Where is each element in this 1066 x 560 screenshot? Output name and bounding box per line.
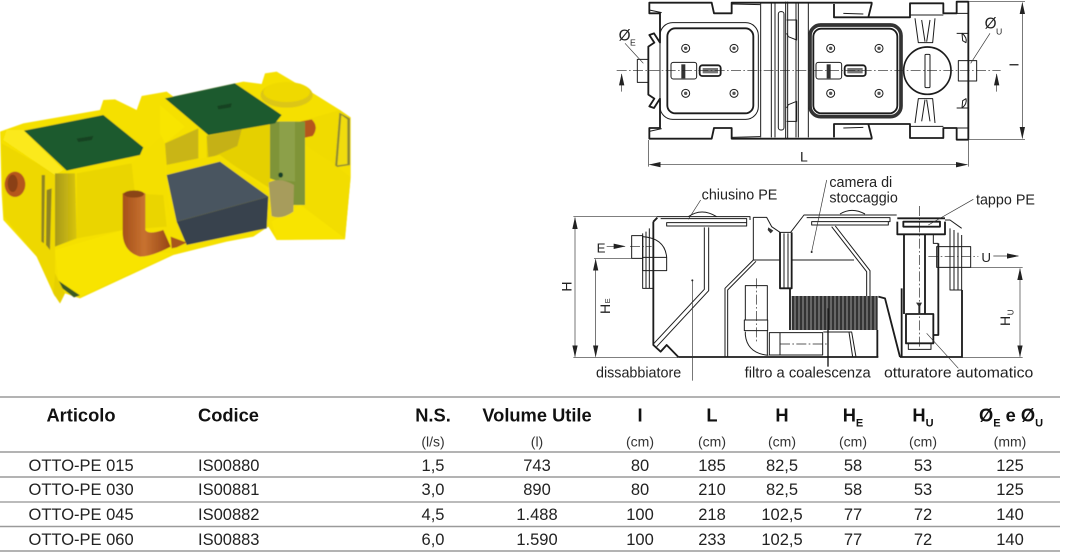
row OTTO-PE 030: 210 [698,481,726,499]
row OTTO-PE 045: 218 [698,506,726,524]
front left tip [53,273,65,303]
left manhole lid [660,23,758,119]
dimension HU [962,268,1023,358]
flow labels [597,241,1018,265]
left chamber floor [55,230,173,297]
callout otturatore automatico [884,333,1033,382]
dimension H [559,217,678,358]
divider wall [132,135,170,217]
central vertical bands [761,2,808,139]
top rim highlight [3,130,63,175]
pipe stubs [637,59,648,82]
label diameter E [619,28,643,63]
row OTTO-PE 030: 3,0 [422,481,444,499]
header row: U [1035,418,1043,430]
left pipe inlet [5,172,25,197]
outlet pipe [937,247,971,267]
centre chamber back [165,128,198,165]
row OTTO-PE 015: IS00880 [198,457,259,475]
beige float [269,180,294,217]
row OTTO-PE 045: 1.488 [516,506,558,524]
callout dissabbiatore [596,279,693,382]
row OTTO-PE 030: OTTO-PE 030 [28,481,134,499]
row OTTO-PE 045: 140 [996,506,1024,524]
label diameter U [971,16,1002,63]
dimension HU: H [997,316,1013,326]
row OTTO-PE 060: 102,5 [761,531,803,549]
units row: (l) [531,434,543,450]
callout camera di stoccaggio: camera di [829,175,892,191]
inlet elbow [632,236,667,271]
dimension I: I [1006,63,1021,67]
wall slots [41,175,52,250]
units row: (cm) [626,434,654,450]
row OTTO-PE 030: 82,5 [766,481,798,499]
row OTTO-PE 060: 233 [698,531,726,549]
row OTTO-PE 045 [28,506,1024,524]
round cap [261,82,313,108]
3D cutaway illustration of separator [0,72,351,303]
translucent green cylinder [270,122,305,205]
floor strip [167,155,268,197]
centre line [617,70,1001,72]
row OTTO-PE 030: IS00881 [198,481,259,499]
left front wall [2,143,55,297]
yellow tank body [0,72,351,303]
dark underside strip [57,280,80,297]
label diameter E: E [630,37,636,47]
row OTTO-PE 060: 1.590 [516,531,558,549]
left chamber back wall [55,173,77,247]
header row [46,404,1043,430]
row OTTO-PE 060 [28,531,1024,549]
header row: H [912,404,926,426]
row OTTO-PE 015: 53 [914,457,932,475]
header row: E [856,418,863,430]
units row: (cm) [768,434,796,450]
header row: L [706,404,718,426]
sloped upper panel [160,105,185,143]
dimension I [968,2,1025,139]
dimension HE [594,258,632,357]
row OTTO-PE 060: OTTO-PE 060 [28,531,134,549]
specification table [0,397,1060,551]
side section technical drawing [559,175,1035,382]
row OTTO-PE 045: 102,5 [761,506,803,524]
outlet column with float [897,218,945,349]
dimension L [648,140,968,167]
row OTTO-PE 045: 4,5 [422,506,444,524]
callout camera di stoccaggio: stoccaggio [829,190,898,206]
dimension H: H [559,282,575,292]
units row: (cm) [698,434,726,450]
table rules [0,397,1060,551]
internal elbow pipe [744,286,823,355]
row OTTO-PE 015: 58 [844,457,862,475]
row OTTO-PE 045: OTTO-PE 045 [28,506,134,524]
row OTTO-PE 015: OTTO-PE 015 [28,457,134,475]
row OTTO-PE 045: IS00882 [198,506,259,524]
round cap [904,47,951,94]
right outlet pipe [300,119,316,138]
row OTTO-PE 030: 58 [844,481,862,499]
grey coalescing block [167,162,268,222]
label diameter E: Ø [619,28,631,45]
header row: e Ø [1001,404,1035,426]
section arrows [622,74,997,92]
callout chiusino PE: chiusino PE [702,188,777,204]
callout chiusino PE [688,188,777,219]
row OTTO-PE 030: 890 [523,481,551,499]
row OTTO-PE 045: 77 [844,506,862,524]
row OTTO-PE 060: 140 [996,531,1024,549]
right manhole lid [810,25,901,117]
row OTTO-PE 060: 77 [844,531,862,549]
header row: H [775,404,789,426]
header row: I [637,404,643,426]
callout camera di stoccaggio [811,175,898,253]
brown elbow pipe [123,191,171,257]
row OTTO-PE 015: 125 [996,457,1024,475]
tank outline top half [648,2,968,71]
row OTTO-PE 060: IS00883 [198,531,259,549]
right chamber floor [272,205,345,240]
row OTTO-PE 060: 6,0 [422,531,444,549]
header row: Codice [198,404,259,426]
left lid [24,115,143,171]
coalescing filter [792,296,878,357]
flow labels: E [597,241,606,256]
row OTTO-PE 060: 72 [914,531,932,549]
row OTTO-PE 030: 125 [996,481,1024,499]
callout tappo PE [928,193,1035,225]
units row: (cm) [839,434,867,450]
callout dissabbiatore: dissabbiatore [596,366,681,382]
row OTTO-PE 045: 72 [914,506,932,524]
callout tappo PE: tappo PE [976,193,1035,209]
plan view technical drawing [617,2,1025,167]
row OTTO-PE 015: 743 [523,457,551,475]
tank section profile [643,210,962,357]
flow labels: U [981,250,991,265]
row OTTO-PE 015: 185 [698,457,726,475]
dimension HU: U [1006,309,1015,315]
right lid [165,83,282,135]
callout otturatore automatico: otturatore automatico [884,366,1033,382]
row OTTO-PE 030: 80 [631,481,649,499]
row OTTO-PE 060: 100 [626,531,654,549]
header row: N.S. [415,404,451,426]
right lower wall [302,145,351,238]
row OTTO-PE 015: 1,5 [422,457,444,475]
row OTTO-PE 015: 82,5 [766,457,798,475]
header row: Ø [979,404,993,426]
row OTTO-PE 045: 100 [626,506,654,524]
label diameter U: Ø [985,16,997,33]
callout filtro a coalescenza [745,308,871,382]
header row: H [843,404,856,426]
row OTTO-PE 030: 53 [914,481,932,499]
header row: Volume Utile [482,404,592,426]
units row: (l/s) [421,434,445,450]
callout filtro a coalescenza: filtro a coalescenza [745,366,871,382]
row OTTO-PE 030 [28,481,1024,499]
header row: Articolo [46,404,116,426]
dimension HE: HE [597,298,613,314]
header row: E [993,418,1001,430]
row OTTO-PE 015 [28,457,1024,475]
row OTTO-PE 015: 80 [631,457,649,475]
units row: (cm) [909,434,937,450]
right upper wall [305,110,350,166]
units row: (mm) [994,434,1026,450]
dimension L: L [800,149,808,165]
header row: U [926,418,934,430]
centre lines [630,206,978,350]
label diameter U: U [996,27,1002,37]
units row [421,434,1026,450]
